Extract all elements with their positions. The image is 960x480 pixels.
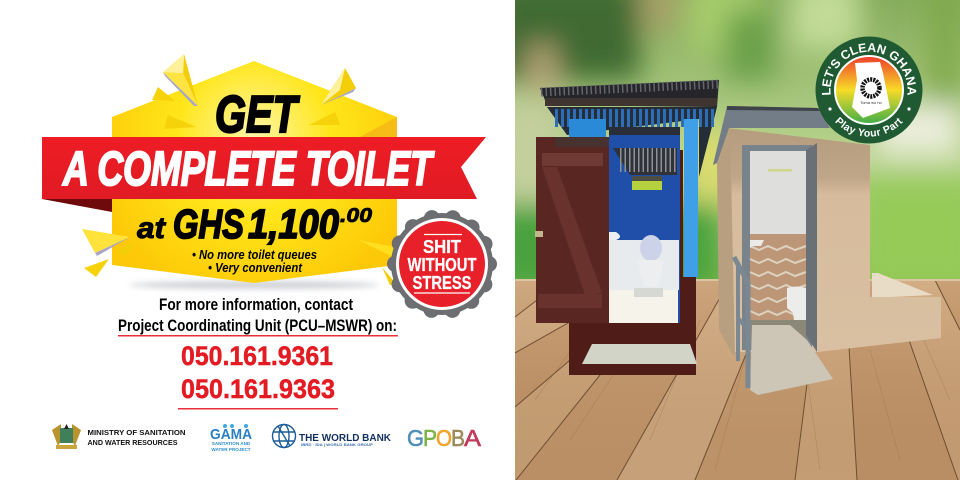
logo: GPOBA: A (464, 425, 482, 451)
tiled wall and floor (609, 232, 679, 323)
door opening (742, 145, 812, 350)
phone numbers (181, 341, 335, 404)
ledge (872, 273, 933, 298)
price: at (137, 212, 167, 245)
badge rules (414, 234, 470, 293)
logo: GAMA: GAMA (210, 426, 252, 443)
badge: Shit without stress (391, 213, 493, 315)
emblem caption: Toma wo ho (860, 100, 883, 105)
white left panel (0, 0, 515, 480)
shaded side wall (717, 128, 735, 356)
concrete step (582, 344, 697, 364)
price (137, 201, 372, 247)
logo: Ministry of Sanitation: MINISTRY OF SANITATION (88, 428, 186, 437)
phone numbers: 050.161.9361 (181, 341, 333, 371)
logo: The World Bank: THE WORLD BANK (299, 433, 392, 444)
metal roof (713, 106, 830, 165)
logo: GPOBA (407, 425, 482, 451)
benefits list: • No more toilet queues (192, 247, 317, 262)
ramp (750, 325, 833, 395)
benefits list (192, 247, 317, 275)
main wall with side extension (727, 128, 941, 352)
badge text: SHIT (423, 237, 461, 257)
blurred garden background (490, 0, 960, 290)
logo: GPOBA: O (436, 425, 452, 451)
heading: A COMPLETE TOILET: A COMPLETE TOILET (62, 143, 435, 196)
ring dots (828, 107, 911, 111)
price: GHS (173, 201, 244, 247)
ribbon fold (42, 199, 112, 212)
logo: Ministry of Sanitation: AND WATER RESOURCES (88, 438, 178, 447)
brown base (569, 150, 696, 375)
logo: The World Bank: IBRD · IDA | WORLD BANK GROUP (301, 442, 373, 447)
logo ring text top: LET'S CLEAN GHANA (822, 43, 916, 96)
contact text: Project Coordinating Unit (PCU–MSWR) on: (118, 316, 397, 335)
blue pillars (569, 119, 698, 277)
decorative yellow shards (82, 54, 397, 285)
toilet: beige block toilet (713, 106, 941, 395)
map of Ghana (852, 62, 890, 118)
price: 1,100 (248, 201, 339, 247)
panel: photo background (490, 0, 960, 480)
yellow hexagon panel (112, 61, 397, 283)
logo: The World Bank (272, 424, 392, 448)
logo: GAMA (210, 424, 252, 452)
interior (609, 127, 680, 323)
logo: Let's Clean Ghana (816, 36, 922, 144)
logo: GPOBA: P (423, 425, 437, 451)
hexagon corner shade (360, 117, 397, 137)
red ribbon (42, 137, 486, 199)
logo: GAMA: WATER PROJECT (211, 447, 251, 452)
badge text (408, 237, 476, 293)
coat of arms (52, 424, 81, 449)
star emblem (862, 80, 880, 96)
contact text (118, 295, 397, 335)
contact rule (118, 335, 398, 336)
toilet: blue and brown pit latrine (535, 80, 719, 375)
phone rule (178, 408, 338, 410)
hand rail (734, 257, 748, 388)
interior ceiling (609, 127, 680, 190)
wooden door (535, 137, 609, 323)
contact text: For more information, contact (159, 295, 353, 314)
shadow below hexagon (129, 281, 379, 289)
wooden deck (515, 279, 960, 480)
corrugated roof (540, 80, 719, 107)
heading: GET: GET (215, 86, 300, 144)
logo ring text bottom: Play Your Part (835, 116, 903, 137)
logo: GAMA: SANITATION AND (212, 441, 251, 446)
gradient disc (835, 56, 903, 124)
roof underside (547, 107, 717, 177)
phone numbers: 050.161.9363 (181, 374, 335, 404)
benefits list: • Very convenient (208, 260, 303, 275)
badge text: WITHOUT (408, 255, 476, 275)
toilet bowl (634, 235, 664, 297)
badge text: STRESS (412, 273, 472, 293)
price: .00 (340, 205, 372, 227)
logo: GPOBA: G (407, 425, 424, 451)
logo: Ministry of Sanitation (52, 424, 186, 449)
logo: GPOBA: B (451, 425, 465, 451)
glazed door leaf (806, 143, 817, 352)
